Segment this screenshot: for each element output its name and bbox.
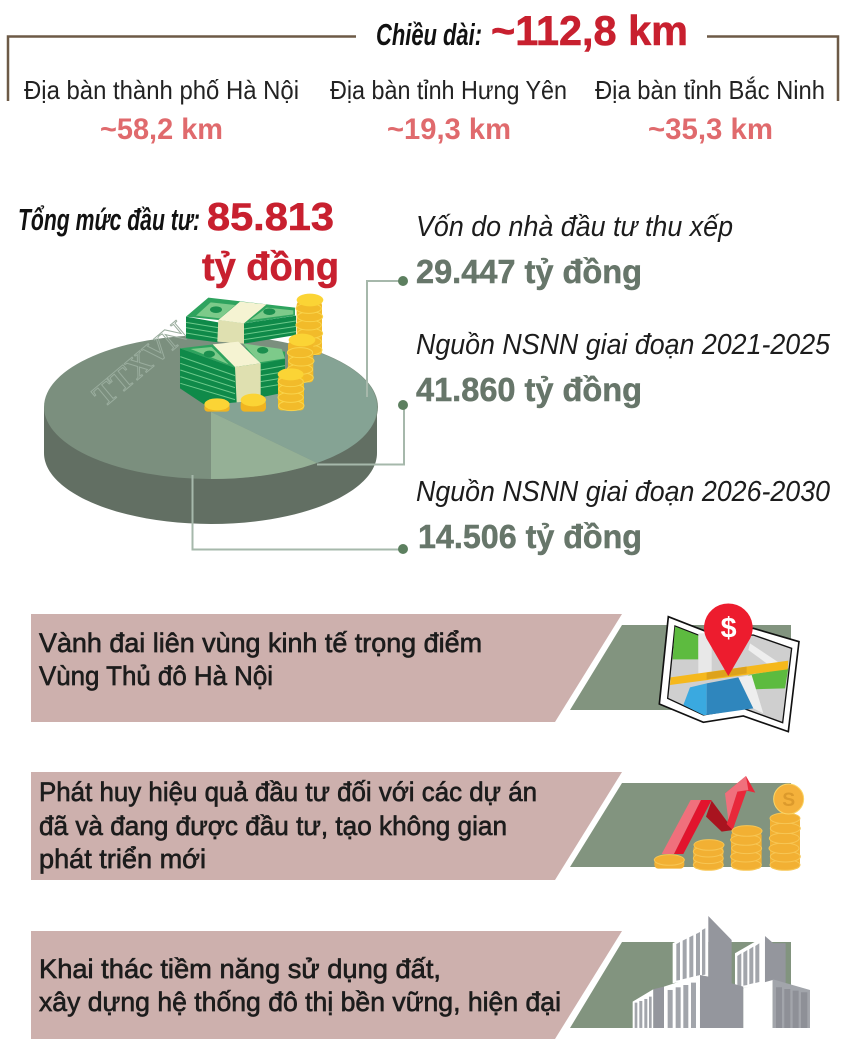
panel: banner 1 [31, 614, 791, 722]
heading: total investment: Tổng mức đầu tư: [18, 202, 200, 237]
heading: total length [376, 7, 688, 54]
panel: banner 3 [31, 931, 791, 1039]
legend dots [398, 276, 408, 554]
panel: banner 3: xây dựng hệ thống đô thị bền vững, hiện đại [39, 987, 561, 1017]
panel: banner 2: đã và đang được đầu tư, tạo không gian [39, 811, 507, 841]
investor capital [416, 211, 733, 290]
state budget 2026-2030 [416, 476, 830, 555]
icon: money and coins [180, 294, 323, 412]
small coins [204, 394, 266, 412]
segment: Bắc Ninh [595, 75, 825, 146]
panel: banner 3: Khai thác tiềm năng sử dụng đất, [39, 954, 441, 984]
icon: rising arrow and coins [654, 776, 804, 870]
panel: banner 2 [31, 772, 791, 880]
segment: Hà Nội [24, 75, 299, 146]
3D pie chart: TTXVN [85, 314, 194, 413]
icon: rising arrow and coins: S [782, 790, 795, 811]
investor capital: 29.447 tỷ đồng [416, 253, 642, 290]
segment: Hưng Yên [330, 75, 567, 146]
state budget 2021-2025 [416, 329, 830, 408]
heading: total length: ~112,8 km [491, 7, 688, 54]
icon: buildings [633, 916, 810, 1028]
segment: Hưng Yên: ~19,3 km [387, 113, 511, 146]
segment: Hưng Yên: Địa bàn tỉnh Hưng Yên [330, 75, 567, 105]
state budget 2026-2030: 14.506 tỷ đồng [418, 518, 642, 555]
panel: banner 2: phát triển mới [39, 844, 206, 874]
front coin stack [278, 368, 304, 411]
icon: map with pin [659, 603, 799, 732]
icon: map with pin: $ [721, 612, 737, 644]
panel: banner 1: Vành đai liên vùng kinh tế trọng điểm [39, 628, 482, 658]
segment: Hà Nội: Địa bàn thành phố Hà Nội [24, 75, 299, 105]
panel: banner 1: Vùng Thủ đô Hà Nội [39, 661, 273, 691]
connector lines [192, 281, 404, 550]
back coin stack [296, 294, 323, 355]
state budget 2021-2025: 41.860 tỷ đồng [416, 371, 642, 408]
middle coin stack [287, 334, 315, 383]
heading: total length: Chiều dài: [376, 17, 482, 52]
heading: total investment [18, 196, 339, 289]
bracket: total length [8, 36, 838, 101]
3D pie chart [44, 314, 378, 524]
heading: total investment: tỷ đồng [202, 246, 339, 289]
segment: Hà Nội: ~58,2 km [100, 113, 223, 146]
heading: total investment: 85.813 [207, 196, 334, 239]
segment: Bắc Ninh: ~35,3 km [648, 113, 773, 146]
panel: banner 2: Phát huy hiệu quả đầu tư đối với các dự án [39, 777, 537, 807]
investor capital: Vốn do nhà đầu tư thu xếp [416, 211, 733, 243]
segment: Bắc Ninh: Địa bàn tỉnh Bắc Ninh [595, 75, 825, 105]
